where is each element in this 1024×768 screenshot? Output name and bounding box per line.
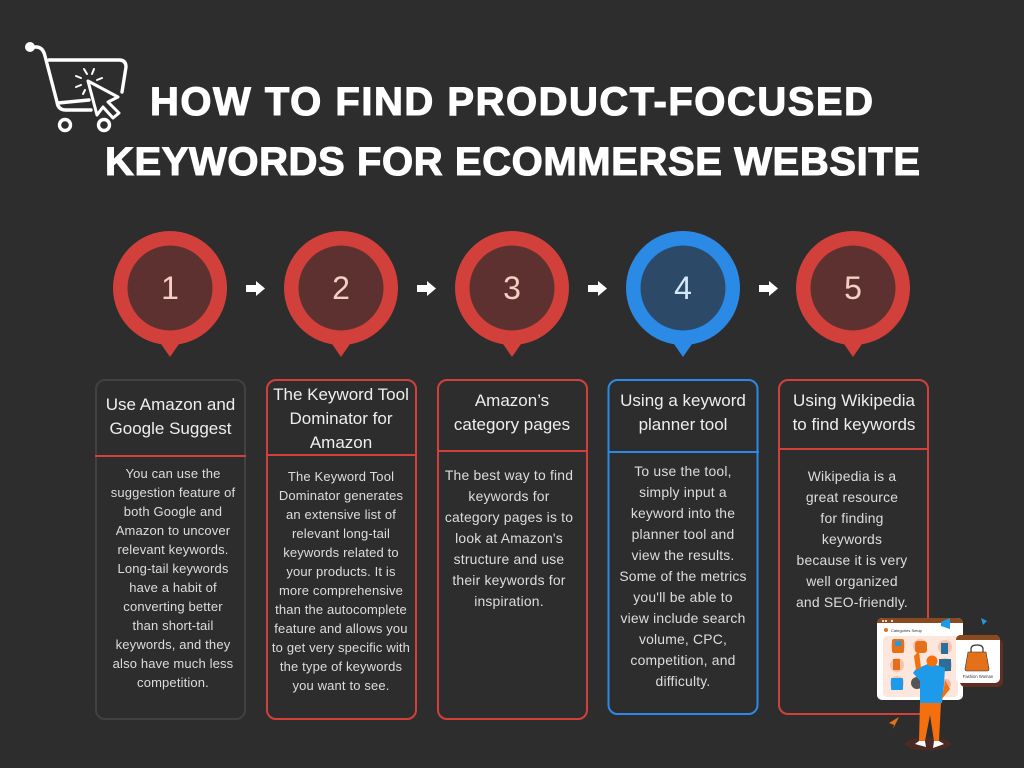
step 1 text: competition. bbox=[137, 675, 209, 690]
step 2 text: keywords related to bbox=[283, 545, 399, 560]
step 5 text: and SEO-friendly. bbox=[796, 594, 908, 610]
step 3 heading: category pages bbox=[454, 415, 570, 434]
step 3 text: The best way to find bbox=[445, 467, 573, 483]
step 3 heading bbox=[454, 391, 570, 434]
arrow 4 to 5 bbox=[759, 281, 778, 296]
step marker 4: 4 bbox=[674, 270, 692, 306]
step 1 text: both Google and bbox=[124, 504, 222, 519]
step 2 text: your products. It is bbox=[286, 564, 396, 579]
step 2 text: than the autocomplete bbox=[275, 602, 407, 617]
step marker 3 bbox=[455, 231, 569, 357]
step 1 text: have a habit of bbox=[129, 580, 217, 595]
step 4 text bbox=[619, 463, 747, 689]
arrow 1 to 2 bbox=[246, 281, 265, 296]
title bbox=[105, 80, 920, 184]
step marker 2: 2 bbox=[332, 270, 350, 306]
step marker 5: 5 bbox=[844, 270, 862, 306]
step 1 text: than short-tail bbox=[132, 618, 214, 633]
step 5 text: keywords bbox=[822, 531, 882, 547]
step 5 text: because it is very bbox=[797, 552, 907, 568]
panel: step 2 card bbox=[266, 380, 417, 719]
step 5 heading bbox=[793, 391, 915, 434]
step 4 text: volume, CPC, bbox=[639, 631, 727, 647]
main window: Categories Setup bbox=[891, 628, 923, 633]
panel: step 4 card bbox=[608, 380, 759, 714]
step marker 1 bbox=[113, 231, 227, 357]
step 3 text bbox=[445, 467, 573, 609]
step 2 text: an extensive list of bbox=[286, 507, 396, 522]
step 1 text: You can use the bbox=[125, 466, 221, 481]
step marker 2 bbox=[284, 231, 398, 357]
arrow 2 to 3 bbox=[417, 281, 436, 296]
small megaphone and cursor accents bbox=[941, 618, 950, 629]
step marker 5 bbox=[796, 231, 910, 357]
step 4 text: To use the tool, bbox=[634, 463, 732, 479]
step 5 heading: Using Wikipedia bbox=[793, 391, 915, 410]
step 1 text: relevant keywords. bbox=[117, 542, 229, 557]
step 5 text: great resource bbox=[806, 489, 898, 505]
step 3 heading: Amazon’s bbox=[475, 391, 549, 410]
step 4 text: view include search bbox=[620, 610, 746, 626]
title: KEYWORDS FOR ECOMMERSE WEBSITE bbox=[105, 140, 920, 184]
step 1 heading: Use Amazon and bbox=[106, 395, 235, 414]
step 2 text: Dominator generates bbox=[279, 488, 403, 503]
step 2 text: the type of keywords bbox=[280, 659, 402, 674]
step 2 text: relevant long-tail bbox=[292, 526, 390, 541]
step 5 heading: to find keywords bbox=[793, 415, 915, 434]
illustration: person browsing product windows bbox=[877, 618, 1003, 750]
step 4 text: you'll be able to bbox=[633, 589, 733, 605]
product window: Fashion Woman bbox=[963, 674, 994, 679]
panel: step 5 card bbox=[778, 380, 929, 714]
step 3 text: their keywords for bbox=[452, 572, 566, 588]
step 1 text: also have much less bbox=[113, 656, 234, 671]
step 4 text: difficulty. bbox=[656, 673, 710, 689]
step 1 text: keywords, and they bbox=[116, 637, 231, 652]
person bbox=[913, 651, 950, 748]
step 5 text bbox=[796, 468, 908, 610]
step 2 heading: Dominator for bbox=[290, 409, 393, 428]
step 5 text: for finding bbox=[820, 510, 884, 526]
step 2 text: feature and allows you bbox=[274, 621, 408, 636]
step 1 text bbox=[111, 466, 236, 690]
step 2 text bbox=[272, 469, 410, 693]
step 2 heading bbox=[273, 385, 409, 452]
step marker 4 bbox=[626, 231, 740, 357]
step 4 text: view the results. bbox=[632, 547, 734, 563]
step 1 heading: Google Suggest bbox=[110, 419, 232, 438]
step 2 text: more comprehensive bbox=[279, 583, 403, 598]
step 2 text: to get very specific with bbox=[272, 640, 410, 655]
step 2 heading: The Keyword Tool bbox=[273, 385, 409, 404]
step 5 text: well organized bbox=[805, 573, 898, 589]
step 4 text: planner tool and bbox=[632, 526, 734, 542]
step 2 heading: Amazon bbox=[310, 433, 372, 452]
step 1 text: Long-tail keywords bbox=[117, 561, 229, 576]
step 1 text: suggestion feature of bbox=[111, 485, 236, 500]
step 2 text: you want to see. bbox=[292, 678, 390, 693]
step 3 text: inspiration. bbox=[474, 593, 544, 609]
step 2 text: The Keyword Tool bbox=[288, 469, 394, 484]
step 3 text: category pages is to bbox=[445, 509, 573, 525]
step marker 1: 1 bbox=[161, 270, 179, 306]
title: HOW TO FIND PRODUCT-FOCUSED bbox=[150, 80, 873, 124]
step 3 text: keywords for bbox=[468, 488, 550, 504]
step 1 text: Amazon to uncover bbox=[116, 523, 231, 538]
step 4 heading: planner tool bbox=[639, 415, 727, 434]
step 4 heading bbox=[620, 391, 746, 434]
panel: step 1 card bbox=[95, 380, 246, 719]
step 4 heading: Using a keyword bbox=[620, 391, 746, 410]
step 4 text: simply input a bbox=[639, 484, 727, 500]
shadow under person bbox=[905, 738, 951, 750]
step 3 text: structure and use bbox=[454, 551, 564, 567]
step 3 text: look at Amazon's bbox=[455, 530, 563, 546]
step marker 3: 3 bbox=[503, 270, 521, 306]
step 4 text: Some of the metrics bbox=[619, 568, 747, 584]
panel: step 3 card bbox=[437, 380, 588, 719]
icon: shopping cart with cursor bbox=[25, 42, 126, 130]
step 1 heading bbox=[106, 395, 235, 438]
step 5 text: Wikipedia is a bbox=[808, 468, 896, 484]
step 4 text: competition, and bbox=[630, 652, 736, 668]
arrow 3 to 4 bbox=[588, 281, 607, 296]
step 1 text: converting better bbox=[123, 599, 223, 614]
step 4 text: keyword into the bbox=[631, 505, 735, 521]
